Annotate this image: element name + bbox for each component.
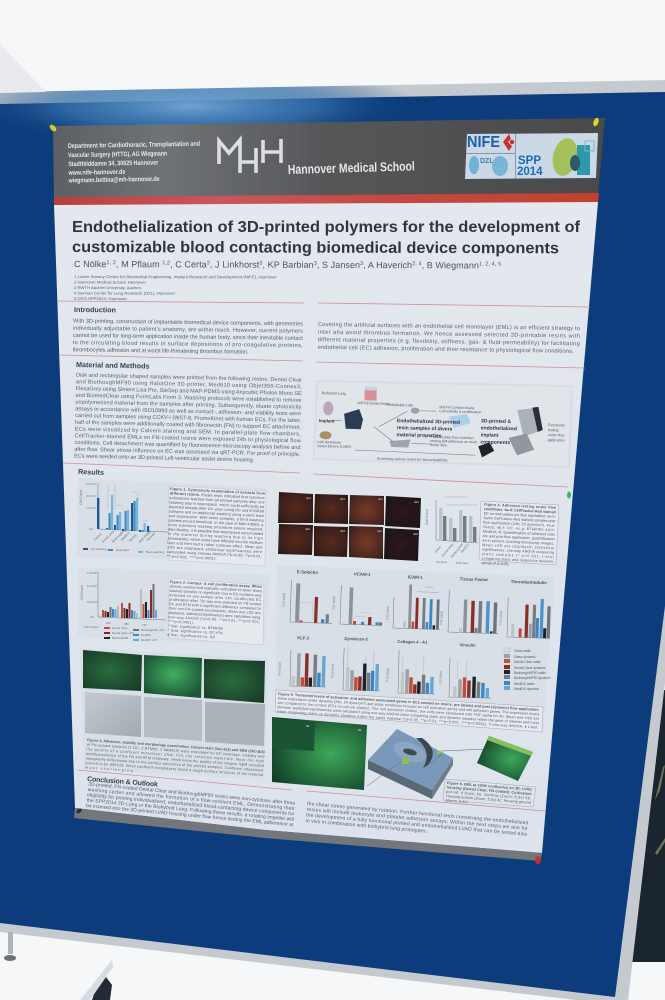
bar chart: proliferation: 0.0 bbox=[90, 615, 95, 619]
endothelialized samples label: material properties bbox=[397, 432, 442, 439]
methods text: after flow. Shear stress influence on EC was assessed via qRT-PCR. For proof of principle, bbox=[74, 447, 301, 458]
figure 6 caption: housing (Dental Clear, FN-coated). Cultivation bbox=[447, 785, 532, 796]
methods text: and BiothoughMF90 using HalotOne 3D-printer, Med610 using Objet350-Connex3, bbox=[76, 379, 302, 390]
micrographs green bbox=[83, 650, 265, 703]
figure 4 caption: EC on resin plates pre flow application; 4e-h: bbox=[484, 511, 556, 519]
chart legend: Med610 +FN bbox=[141, 638, 157, 642]
figure 4 micrographs bbox=[278, 492, 421, 561]
endothelialized samples label bbox=[397, 418, 460, 440]
chart legend: BiothoughMF +FN bbox=[141, 628, 164, 632]
figure 4 micrographs: 4d1 bbox=[414, 500, 419, 504]
authors: C Nölke bbox=[74, 259, 106, 269]
figure 2 caption: ⁺ Stat. significance vs. DC+FN bbox=[167, 628, 223, 635]
figure 3 caption: the quality of a confluent monolayer after 72h, the selected materials. Note the high bbox=[86, 747, 264, 763]
authors: 1,2 bbox=[162, 260, 170, 266]
schematic labels: Assist Device (LVAD) bbox=[317, 444, 351, 449]
conclusion text left: the SPP2014 3D-Lung or the Biohybrid Lung. Following these results, a rotating impeller will bbox=[86, 798, 294, 823]
methods text: conditions. Cell detachment was quantified by fluorescence-microscopy analysis before and bbox=[74, 440, 301, 451]
bar chart: cytotoxicity: Biomed bbox=[146, 531, 156, 542]
authors: 3 bbox=[259, 261, 262, 267]
header address text: www.nife-hannover.de bbox=[68, 169, 126, 177]
chart: Syndecan-2 bbox=[330, 636, 381, 691]
figure 1 caption: permeability, which could have diffused into the medium bbox=[168, 536, 263, 545]
figure 2 caption: one-way ANOVA (*p<0.05, **p<0.01, ***p<0.001, bbox=[168, 615, 260, 624]
chart legend: BiothoughMF bbox=[112, 636, 129, 640]
device 3D model bbox=[367, 729, 488, 799]
figure 4 caption: Med610; 4i: Quantification of adherent cells bbox=[483, 529, 555, 537]
introduction text: thrombocytes adhesion and at worst life-threatening thrombus formation. bbox=[73, 347, 249, 356]
figure 1 caption: Also flexiMa, it is possible that isopropanol accumulated bbox=[168, 527, 263, 536]
figure 3 caption: of FN-coated samples (1 DC, 2 BTM90, 3 Med610) were evaluated for EC coverage, viability and bbox=[87, 743, 265, 759]
poster paper bbox=[54, 202, 598, 853]
authors: 1, 2, 4, 5 bbox=[479, 261, 501, 267]
figure 5 caption: showed; statistical significances were calculated using one-way ANOVA when comparing static and dynamic samples within the gene of interest and t-test bbox=[277, 705, 539, 725]
endothelialized samples label: Endothelialized 3D-printed bbox=[397, 418, 460, 426]
figure 1 caption: in the material during washing due to its high bbox=[168, 532, 263, 541]
figure 1 caption: process proved beneficial. In the case of MAP-PDMS, a bbox=[168, 518, 264, 527]
affiliations: 5 DFG-SPP2014, Hannover bbox=[74, 296, 128, 301]
chart legend bbox=[83, 625, 164, 642]
figure 4 micrographs: 4d2 bbox=[413, 532, 418, 536]
figure 4 caption: significances: one-way ANOVA comparing bbox=[482, 547, 554, 555]
chamber 3D part bbox=[517, 407, 541, 437]
material and methods heading: Material and Methods bbox=[76, 360, 150, 371]
bar chart: cytotoxicity: 2.5×10⁴ bbox=[86, 482, 97, 486]
figure 2 caption: Figure 2. Contact- & cell proliferation assay. When bbox=[170, 580, 262, 589]
figure 4 bar chart: Glass bbox=[434, 545, 442, 554]
chamber dark edge bbox=[532, 407, 543, 432]
authors: , S Jansen bbox=[317, 260, 360, 270]
section divider rules bbox=[58, 301, 590, 811]
chart: ICAM-1: F¹(2-ΔΔct) bbox=[385, 606, 390, 620]
micrographs SEM bbox=[85, 692, 265, 746]
authors: , B Wiegmann bbox=[422, 260, 479, 270]
figure 1 caption: Figure 1. Cytotoxicity examination of extracts from bbox=[170, 487, 266, 496]
chart legend: 1st washing bbox=[91, 547, 107, 551]
figure 2 caption: proliferation after 72h was only detected on FN-coated bbox=[169, 598, 261, 606]
methods text: ECs were visualized by Calcein staining and SEM. In parallel-plate flow chambers, bbox=[75, 426, 301, 438]
schematic labels: under flow bbox=[548, 433, 565, 438]
chart: ICAM-1 bbox=[385, 574, 442, 629]
figure 4 caption: comparing static and respective dynamic bbox=[482, 556, 554, 564]
figure 4 caption: flow application (24h; 20 dyne/cm²). 4a,e: bbox=[483, 520, 555, 528]
methods text: unpolymerized material from the samples after printing. Subsequently, eluate cytotoxicity bbox=[75, 399, 302, 411]
figure 2 caption: displayed; statistical significances were calculated using bbox=[168, 611, 260, 620]
figure 6 caption: Figure 6. EML at 100% confluency on 3D- LVAD bbox=[447, 781, 532, 792]
title: customizable blood contacting biomedical device components bbox=[72, 239, 559, 257]
chart legend bbox=[83, 547, 164, 554]
chart: KLF-2 bbox=[277, 635, 327, 687]
implant components label: components bbox=[480, 439, 510, 446]
figure 2 caption: detected on any sample after 24h. Unaffected EC bbox=[169, 593, 262, 602]
schematic labels: under flow bbox=[430, 443, 447, 447]
conclusion text left: eligibility for printing individualized, endothelialized blood-contacting device components for bbox=[87, 792, 295, 817]
figure 2 caption: * Stat. significance vs. BTMF90 bbox=[168, 624, 223, 631]
introduction text right column: inter alia avoid thrombus formation. We hence assessed selected 3D-printable resins with bbox=[318, 330, 580, 340]
figure 4 micrographs: 4a1 bbox=[306, 496, 311, 500]
figure 4 caption: sample (# p<0.05). bbox=[481, 561, 509, 566]
large fluorescence image bbox=[272, 717, 367, 790]
bar chart: proliferation: 48h bbox=[124, 622, 129, 626]
figure 4 bar chart: Cell Count bbox=[425, 509, 429, 525]
flask icon bbox=[364, 386, 377, 401]
figure 2 caption: directly seeded and statically cultivated on three times bbox=[170, 584, 262, 593]
figure 2 caption: ♦ Stat. significance vs. DC bbox=[167, 633, 216, 639]
lung icon bbox=[323, 401, 333, 415]
figure 4 caption: conditions. 4a-d: CellTracker-Red stained bbox=[484, 507, 556, 514]
schematic labels bbox=[317, 391, 566, 466]
poster bottom edge bbox=[74, 808, 542, 861]
chart: Collagen: F¹(2-ΔΔct) bbox=[385, 668, 390, 682]
gene chart legend: Dental Clear static bbox=[514, 660, 541, 664]
bar chart: cytotoxicity: Cell Count bbox=[79, 490, 83, 505]
chart: Thrombomodulin bbox=[498, 579, 552, 638]
authors: , J Linkhorst bbox=[210, 259, 260, 270]
chart legend: Dental Clear +FN bbox=[112, 631, 134, 635]
schematic labels: application bbox=[547, 438, 565, 443]
conclusion text right: resins will include leukocyte and platelet adhesion assays. Within the next steps we aim for bbox=[306, 807, 528, 832]
authors: , M Pflaum bbox=[116, 259, 162, 269]
sample tile bbox=[449, 413, 471, 428]
bar chart: cytotoxicity: BiothoughMF bbox=[111, 528, 126, 544]
introduction heading: Introduction bbox=[74, 305, 116, 314]
bar chart: cytotoxicity: 2.0×10⁴ bbox=[86, 494, 97, 498]
figure 5 caption: are compared to the control (ECs on culture plastic). The cell activation marker, the cells were stimulated with TNF alpha for 4h. Mean and ±SD are bbox=[277, 701, 539, 721]
partner logos: DZL bbox=[480, 158, 494, 165]
figure 3 caption: Figure 3. Adhesion, viability and morphology examination. Calcein stain (3a1-3a3) and SEM (3b1-3b3) bbox=[87, 738, 265, 754]
conclusion text right: the development of a fully functional printed and endothelialized LVAD that can be tested also bbox=[306, 812, 528, 838]
gene chart legend: Glass static bbox=[514, 649, 531, 653]
figure 1 caption bbox=[167, 486, 266, 566]
figure 4 micrographs: 4b1 bbox=[340, 497, 345, 501]
figure 4 caption: Same CellTracker-Red stained samples post bbox=[483, 516, 555, 523]
methods text: Disk and rectangular shaped samples were printed from the following resins: Dental Clear bbox=[76, 373, 302, 384]
implant components label bbox=[480, 418, 517, 446]
figure 3 caption: most challenging. bbox=[85, 766, 135, 773]
figure 4 bar chart: Pre-flow bbox=[436, 560, 448, 564]
panel: figure 2 bbox=[77, 567, 270, 645]
partner logos: NIFE bbox=[467, 134, 500, 151]
conclusion text left: be inserted into the 3D-printed LVAD housing under flow hence testing the EML adherence at bbox=[86, 803, 294, 828]
chart: Vinculin: F¹(2-ΔΔct) bbox=[438, 671, 443, 685]
schematic labels: Screening various resins for Biocompatibility bbox=[377, 457, 448, 462]
figure 3 caption: topography differences due to the surface structures of the printed samples. Confluent attachment bbox=[86, 756, 264, 772]
large fluorescence image: 6b bbox=[306, 724, 310, 728]
methods text: FlexaGrey using Sintent Lisa Pro, SteSep and MAP-PDMS using Anycubic Photon Mono SE bbox=[76, 386, 302, 397]
schematic labels: testing bbox=[548, 428, 558, 432]
figure 1 caption: ***p<0.001, ****p<0.0001). bbox=[167, 554, 217, 561]
affiliations: 3 RWTH Aachen University, Aachen bbox=[74, 285, 141, 290]
bar chart: proliferation: 5.0×10³ bbox=[87, 600, 97, 604]
methods text: carried out from samples using CCKV-I (WST-8, PromoKine) with human ECs. For the latter, bbox=[75, 413, 302, 424]
bar chart: proliferation: 1.0×10⁴ bbox=[87, 584, 98, 588]
chart legend: Dental Clear bbox=[112, 626, 128, 630]
bar chart: cytotoxicity bbox=[79, 482, 190, 554]
affiliations: 1 Lower Saxony Centre for Biomedical Engineering, Implant Research and Development (NIFE), Hannover bbox=[74, 274, 278, 279]
authors: 3 bbox=[360, 261, 363, 267]
figure 4 caption: Figure 4. Adhesion testing under flow bbox=[484, 503, 556, 510]
poster header band bbox=[53, 118, 605, 206]
chart: Thrombomodulin: Thrombomodulin bbox=[511, 579, 547, 585]
title: Endothelialization of 3D-printed polymers for the development of bbox=[72, 219, 581, 236]
bar chart: cytotoxicity: 0.0 bbox=[89, 527, 94, 531]
chart: Collagen: Collagen 4 - A1 bbox=[397, 639, 428, 645]
gene chart legend: BiothoughMF90 static bbox=[514, 671, 546, 675]
poster pins bbox=[48, 117, 600, 864]
figure 1 caption: samples and an additional washing using a sonic bath bbox=[169, 509, 264, 518]
figure 6 caption: (Zoom: 6,3x) bbox=[446, 799, 468, 804]
conclusion heading: Conclusion & Outlook bbox=[87, 776, 158, 789]
chart: Tissue Factor: F¹(2-ΔΔct) bbox=[439, 611, 444, 625]
header address text: Stadtfelddamm 34, 30625 Hannover bbox=[68, 160, 159, 168]
figure 2 caption: their non-FN-coated counterparts. Mean and ±SD are bbox=[169, 606, 261, 615]
methods text: assays in accordance with ISO10993 as well as contact-, adhesion- and viability tests were bbox=[75, 406, 301, 417]
authors: 1, 2 bbox=[106, 260, 116, 266]
figure 1 caption: ±SD are displayed; statistical significances were bbox=[167, 545, 262, 554]
figure 2 caption: DC and BTM with a significant difference compared to bbox=[169, 602, 261, 611]
bar chart: proliferation: 72h bbox=[142, 623, 147, 627]
housing 3D part bbox=[508, 433, 535, 456]
schematic labels: Endothelial Cells bbox=[386, 403, 413, 408]
sample dish bbox=[411, 407, 420, 414]
bar chart: cytotoxicity: Control bbox=[93, 532, 103, 542]
chart legend: Best washing bbox=[146, 550, 164, 554]
title bbox=[72, 219, 581, 257]
implant components label: endothelialized bbox=[481, 425, 517, 432]
bar chart: cytotoxicity: SteSep bbox=[128, 533, 138, 543]
figure 1 caption: later and then had a rather cytotoxic effect. Mean and bbox=[167, 541, 262, 550]
introduction text: cannot be used for long-term application inside the human body, since their inevitable contact bbox=[73, 333, 303, 342]
figure 4 caption: Mean ±SD are displayed; statistical bbox=[482, 543, 554, 550]
partner logos: 2014 bbox=[517, 166, 543, 178]
bar chart: proliferation: 24h bbox=[106, 621, 111, 625]
methods text: and BiomedClear using FormLabs Form 3. Washing protocols were established to remove bbox=[75, 393, 302, 404]
figure 6 caption: Housing bottom (Zoom: 5,3x) 6c: Housing ground bbox=[446, 794, 531, 805]
conclusion text left: 3D-printed, FN-coated Dental Clear and BiothoughMF90 resins were non-cytotoxic after three bbox=[88, 782, 296, 807]
figure 6 caption bbox=[443, 779, 536, 809]
chart: Vinculin bbox=[438, 642, 492, 698]
conclusion text right: in vivo in combination with biohybrid lung prototypes. bbox=[305, 818, 427, 835]
authors: 3 bbox=[207, 260, 210, 266]
figure 4 caption: Glass; 4b,f: DC; 4c,g: BTMF90; 4d,h: bbox=[483, 525, 555, 532]
housing thumbnail bbox=[319, 431, 332, 439]
chart: KLF-2: KLF-2 bbox=[297, 635, 310, 641]
figure 1 caption: different resins. Eluate tests indicated that cytotoxic bbox=[170, 491, 265, 500]
schematic labels: Left Ventricular bbox=[317, 440, 342, 445]
figure 1 caption: substances leached from all printed samples after one bbox=[170, 496, 265, 505]
chart: Vinculin: Vinculin bbox=[459, 642, 476, 648]
large fluorescence image: 6a bbox=[358, 728, 362, 732]
figure 6 caption: period: 4 Days; 6a: Outflow (Zoom: 5,3x) 6b: bbox=[446, 790, 531, 800]
figure 4 bar chart: Post-flow bbox=[456, 561, 469, 565]
affiliations: 4 German Center for Lung Research (DZL), Hannover bbox=[74, 290, 176, 296]
panel: figure 1 bbox=[77, 478, 267, 566]
figure 4 bar chart bbox=[425, 497, 478, 565]
bar chart: cytotoxicity: Med610 bbox=[120, 531, 131, 542]
figure 5 caption: Gene expression under dynamic (24h, 20 dyne/cm²) and static conditions focused on cell activation genes and cell adhesion genes. The expression levels bbox=[278, 696, 540, 716]
gene chart legend: Med610 static bbox=[514, 682, 535, 686]
schematic labels: WST-8 Eluate Assay bbox=[357, 401, 390, 406]
header address text: Vascular Surgery (HTTG), AG Wiegmann bbox=[68, 150, 167, 159]
methods text: half of the samples were additionally coated with fibronectin (FN) to support EC attachment. bbox=[75, 420, 301, 431]
figure 2 caption: washed samples no significant loss in EC numbers was bbox=[169, 589, 262, 598]
gene chart legend: BiothoughMF90 dynamic bbox=[514, 676, 551, 680]
partner logos: SPP bbox=[518, 155, 541, 167]
figure 4 caption bbox=[479, 501, 559, 568]
chart: ICAM-1: ICAM-1 bbox=[408, 574, 423, 580]
methods text: ECs were seeded onto an 3D-printed Left ventricular assist device housing. bbox=[74, 453, 255, 464]
introduction text bbox=[73, 319, 303, 356]
figure 4 caption: static samples (* p<0.05), t-test bbox=[482, 552, 554, 559]
partner logos bbox=[465, 133, 598, 179]
bar chart: proliferation: Cell Count bbox=[80, 585, 84, 600]
figure 4 bar chart: Dental Clear bbox=[441, 542, 454, 558]
schematic labels: Biohybrid Lung bbox=[322, 391, 346, 396]
schematic labels: Implant bbox=[319, 418, 335, 424]
authors: , KP Barbian bbox=[262, 260, 314, 270]
methods text bbox=[74, 373, 303, 465]
figure 4 micrographs: 4a2 bbox=[305, 527, 310, 531]
chart: VCAM-1: F¹(2-ΔΔct) bbox=[331, 596, 336, 610]
black frame part bbox=[478, 442, 494, 458]
workflow schematic bbox=[313, 380, 573, 468]
MHH logo bbox=[219, 139, 281, 173]
authors: 3 bbox=[314, 261, 317, 267]
small fluorescence image bbox=[477, 736, 533, 781]
figure 4 micrographs: 4c1 bbox=[378, 497, 383, 501]
bar chart: cytotoxicity: MAP-PDMS bbox=[138, 529, 152, 544]
implant components label: 3D-printed & bbox=[481, 418, 511, 425]
figure 2 caption bbox=[167, 578, 264, 645]
chart: E-Selectin: F¹(2-ΔΔct) bbox=[282, 593, 286, 607]
figure 4 micrographs: 4c2 bbox=[377, 529, 382, 533]
figure 1 caption: and isopropanol. With some samples, a third washing bbox=[169, 514, 264, 523]
methods text: CellTracker-stained EMLs on FN-coated resins were exposed 24h to physiological flow bbox=[75, 433, 301, 444]
gene chart legend bbox=[504, 648, 551, 691]
figure 5 caption bbox=[275, 690, 543, 732]
chart legend: TCP Control bbox=[83, 625, 99, 629]
introduction text right column: endothelial cell (EC) adhesion, proliferation and their resistance to physiological flow conditions. bbox=[318, 345, 574, 355]
bar chart: proliferation bbox=[80, 571, 166, 642]
schematic labels: WST-8 Contact Assay bbox=[439, 405, 475, 410]
printer icon bbox=[344, 409, 363, 429]
chart: Syndecan-2: Syndecan-2 bbox=[344, 636, 369, 642]
introduction text: With 3D-printing, construction of implantable biomedical device components, with geometries bbox=[73, 319, 303, 328]
gene chart legend: Glass dynamic bbox=[514, 655, 536, 659]
implant components label: implant bbox=[481, 432, 499, 439]
chart legend: Detached bbox=[116, 548, 129, 552]
conclusion text right bbox=[305, 801, 529, 843]
schematic labels: Functional bbox=[548, 423, 565, 428]
endothelialized samples label: resin samples of divers bbox=[397, 425, 453, 433]
authors: , C Certa bbox=[170, 259, 207, 269]
chart: E-Selectin: E-Selectin bbox=[297, 569, 318, 575]
chart: VCAM-1 bbox=[331, 571, 384, 625]
chart: E-Selectin bbox=[281, 569, 334, 623]
figure 4 caption: 4a in percent counting microscopy images. bbox=[482, 538, 554, 546]
figure 5 caption: Figure 5. Transcript levels of activation- and adhesion associated genes in ECs seeded on resins, pre (static) and post (dynamic) flow application. bbox=[278, 692, 540, 712]
conclusion text left bbox=[86, 782, 296, 828]
figure 3 caption: autofluorescence of the FN and BTM materials, which limits the quality of the images. SEM revealed bbox=[86, 752, 264, 768]
header address text bbox=[67, 141, 201, 185]
introduction text right column: Covering the artificial surfaces with an endothelial cell monolayer (EML) is an efficient strategy to bbox=[318, 322, 580, 332]
schematic labels: Cell viability & proliferation bbox=[439, 409, 481, 414]
floor stand details bbox=[4, 932, 113, 1000]
figure 1 caption: calculated using oneway ANOVA (*p<0.05, **p<0.01, bbox=[167, 550, 262, 559]
figure 4 micrographs: 4b2 bbox=[340, 529, 345, 533]
panel: figure 3 bbox=[80, 648, 268, 782]
conclusion text right: the shear stress generated by rotation. Further functional tests concerning the endothelialized bbox=[307, 801, 529, 826]
figure 4 bar chart: BiothoughMF bbox=[450, 542, 464, 559]
panel: figure 5 gene expression bbox=[275, 565, 555, 732]
conclusion text left: washing cycles and allowed the formation of a flow-resilient EML. Demonstrating their bbox=[87, 787, 295, 812]
schematic labels: testing EM adhesion on resin bbox=[430, 439, 477, 444]
chart: Thrombomodulin: F¹(2-ΔΔct) bbox=[498, 611, 503, 625]
figure 4 caption: pre and post flow application. Quantification bbox=[483, 534, 555, 541]
panel: figure 6 bbox=[272, 717, 536, 809]
bar chart: proliferation: 1.5×10⁴ bbox=[87, 571, 98, 575]
bar chart: cytotoxicity: Dental Clear bbox=[101, 529, 116, 544]
figure 5 caption: when comparing static vs dynamic samples within the same material (*p<0.05, **p<0.01, ***p<0.001, ****p<0.0001), # one-way ANOVA, ♦ t-test. bbox=[277, 710, 539, 730]
flow arrows bbox=[331, 408, 476, 455]
affiliations bbox=[74, 274, 278, 301]
chart: Collagen bbox=[385, 639, 436, 694]
gene chart legend: Dental Clear dynamic bbox=[514, 666, 546, 670]
figure 1 caption: depleted already after UV- post curing DC and BTMF90 bbox=[169, 505, 264, 514]
chart legend: Med610 bbox=[141, 633, 152, 637]
chart: KLF-2: F¹(2-ΔΔct) bbox=[277, 662, 282, 676]
header address text: wiegmann.bettina@mh-hannover.de bbox=[68, 176, 160, 185]
chart: Syndecan-2: F¹(2-ΔΔct) bbox=[330, 664, 335, 678]
figure 4 bar chart: Med610 bbox=[460, 543, 470, 554]
introduction text: individually adjustable to patient's anatomy, are within reach. However, current polymers bbox=[73, 326, 303, 335]
chart: Tissue Factor bbox=[439, 576, 500, 634]
results heading: Results bbox=[78, 467, 104, 477]
gene chart legend: Med610 dynamic bbox=[514, 687, 539, 691]
school name: Hannover Medical School bbox=[288, 158, 415, 177]
affiliations: 2 Hannover Medical School, Hannover bbox=[74, 279, 147, 285]
authors: , A Haverich bbox=[363, 260, 412, 270]
chart: VCAM-1: VCAM-1 bbox=[354, 571, 371, 577]
header address text: Department for Cardiothoracic, Transplantation and bbox=[68, 141, 200, 150]
bar chart: cytotoxicity: 1.0×10⁴ bbox=[86, 506, 97, 510]
introduction text right column: different material properties (e.g. flexibility, stiffness, gas- & fluid-permeability) for facilitating bbox=[318, 337, 580, 347]
poster bbox=[48, 117, 605, 864]
figure 3 caption: proved to be difficult; these confluent monolayers found a rough surface structure of the material bbox=[85, 761, 263, 777]
figure 2 caption: ****p<0.0001). bbox=[168, 620, 194, 625]
figure 3 caption bbox=[85, 738, 265, 782]
introduction text: to the circulating blood results in surface depositions of pro-coagulative proteins, bbox=[73, 340, 303, 349]
plate sample bbox=[389, 439, 410, 447]
figure 1 caption: washing step in isopropanol, which could sufficiently be bbox=[169, 500, 264, 509]
introduction text right column bbox=[318, 322, 580, 355]
figure 1 caption: more extensive washing procedure seems required. bbox=[168, 523, 263, 532]
chart: Tissue Factor: Tissue Factor bbox=[460, 576, 488, 582]
authors: 2, 4 bbox=[412, 261, 422, 267]
schematic labels: Parallel plate flow chamber: bbox=[430, 435, 475, 440]
